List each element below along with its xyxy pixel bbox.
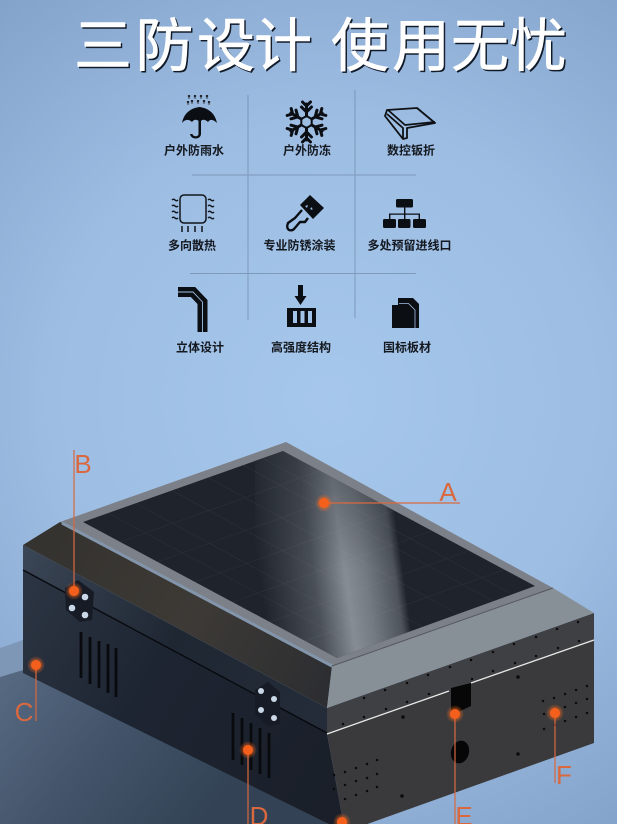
callout D [239, 741, 268, 824]
title: 三防设计使用无忧 [74, 14, 567, 79]
label: 立体设计 [176, 340, 224, 354]
hinge B [65, 580, 94, 622]
icon: bent profile [178, 292, 202, 332]
callout E [446, 705, 473, 824]
right face [327, 640, 594, 824]
label: 高强度结构 [271, 340, 331, 354]
lid left bevel [23, 522, 332, 708]
vents centre [233, 713, 269, 778]
label: 户外防冻 [283, 142, 331, 158]
label: 数控钣折 [387, 142, 435, 158]
title: 三防设计使用无忧 [76, 16, 569, 80]
lid top rim [60, 442, 553, 666]
rivets [333, 621, 588, 800]
callout B: B [74, 449, 92, 479]
icon: pressure block [287, 285, 316, 327]
callout A [315, 477, 460, 512]
label: 专业防锈涂装 [263, 238, 336, 252]
label: 国标板材 [383, 340, 431, 354]
product: solar box [23, 440, 594, 824]
mounting holes [400, 675, 520, 798]
callout C: C [15, 697, 33, 727]
left upper band [23, 545, 327, 733]
callout F [546, 704, 572, 790]
floor and shadow [0, 640, 345, 824]
label: 多向散热 [168, 238, 216, 252]
solar panel [83, 440, 535, 665]
callout B [65, 449, 92, 600]
hinge D [255, 682, 280, 726]
label: 多处预留进线口 [367, 238, 452, 252]
cable notch [451, 683, 471, 713]
label: 户外防雨水 [164, 142, 224, 158]
icon: snowflake [287, 102, 326, 142]
lid right bevel [327, 588, 594, 708]
icon: bent sheet [385, 108, 435, 139]
vents left [81, 632, 116, 697]
icon: paint brush [287, 195, 324, 230]
callout C [15, 656, 45, 727]
icon: network tree [383, 199, 426, 228]
marker bottom [333, 813, 351, 824]
icon: heat chip [172, 195, 214, 232]
right upper band [327, 613, 594, 734]
callout A: A [439, 477, 457, 507]
cable hole [448, 739, 472, 765]
callout F: F [556, 760, 572, 790]
icon: umbrella rain [182, 95, 217, 138]
feature grid [164, 90, 452, 354]
icon: sheets [392, 298, 419, 328]
left face [23, 570, 345, 824]
